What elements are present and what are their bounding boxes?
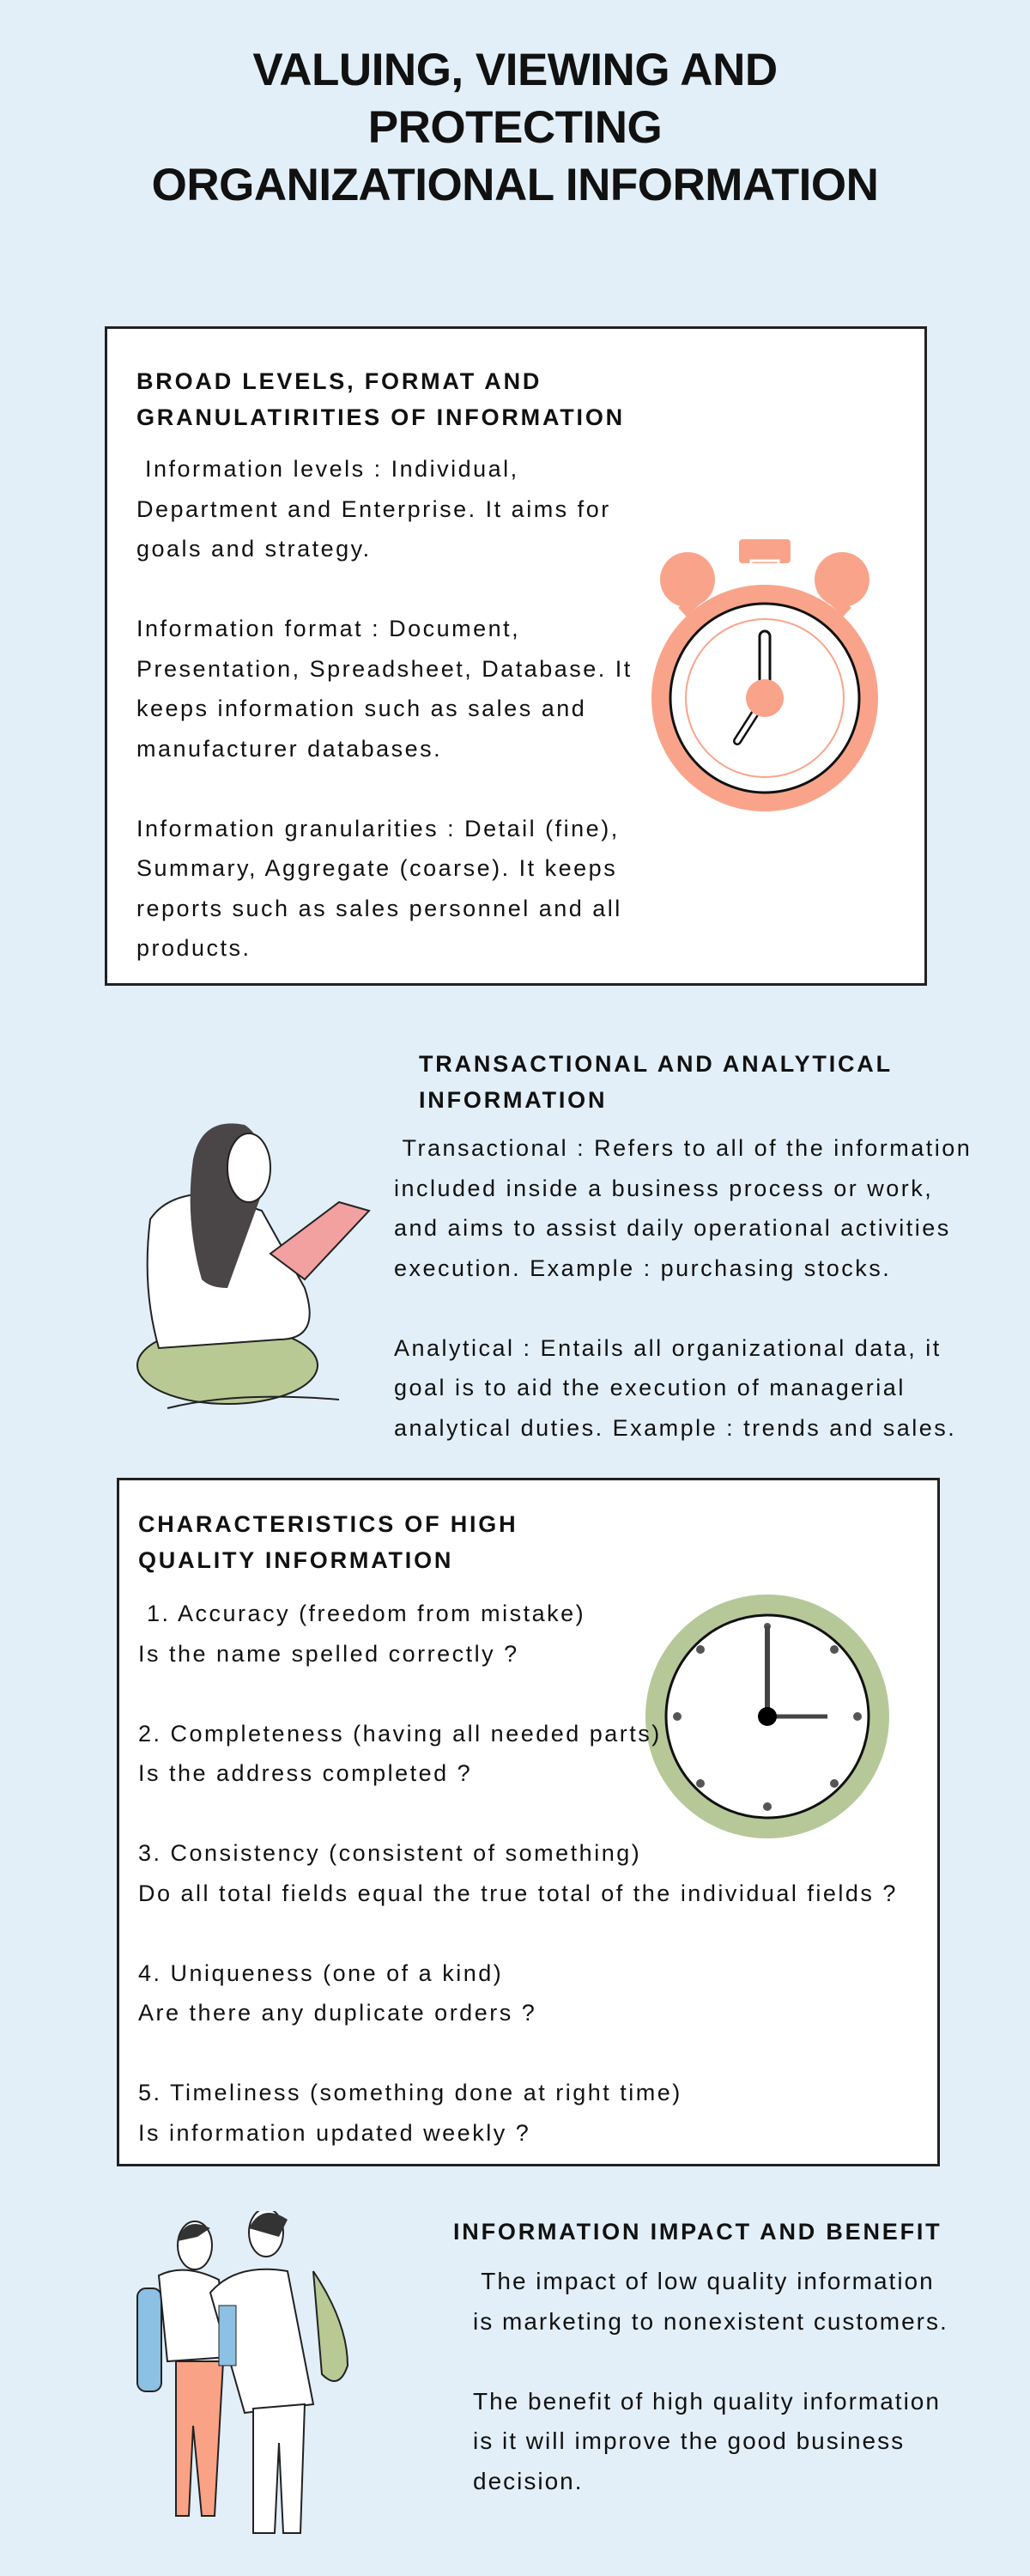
heading: broad levels: BROAD LEVELS, FORMAT AND bbox=[136, 368, 542, 394]
icon: stopwatch bbox=[651, 539, 878, 811]
title bbox=[152, 45, 878, 210]
title: ORGANIZATIONAL INFORMATION bbox=[152, 160, 878, 210]
heading: transactional and analytical: TRANSACTIONAL AND ANALYTICAL bbox=[419, 1051, 893, 1077]
heading: transactional and analytical bbox=[419, 1051, 893, 1113]
icon: wall clock bbox=[645, 1595, 889, 1838]
title: VALUING, VIEWING AND bbox=[252, 45, 778, 95]
heading: broad levels: GRANULATIRITIES OF INFORMATION bbox=[136, 404, 625, 430]
heading: characteristics: QUALITY INFORMATION bbox=[138, 1547, 453, 1573]
illustration: two students bbox=[136, 2211, 348, 2534]
illustration: girl reading bbox=[136, 1123, 371, 1409]
heading: characteristics bbox=[138, 1511, 518, 1573]
panel: characteristics of high quality information bbox=[117, 1478, 940, 2166]
title: PROTECTING bbox=[368, 102, 662, 153]
heading: transactional and analytical: INFORMATION bbox=[419, 1087, 607, 1113]
heading: information impact and benefit: INFORMATION IMPACT AND BENEFIT bbox=[453, 2219, 942, 2245]
heading: broad levels bbox=[136, 368, 625, 430]
text block: levels formats granularities: Information levels : Individual, Department and Enterprise. It aims for goals and strategy. Information format : Document, Presentation, Spreadsheet, Database. It keeps information such as sales and manufacturer databases. Information granularities : Detail (fine), Summary, Aggregate (coarse). It keeps reports such as sales personnel and all products. bbox=[136, 456, 633, 961]
text block: five characteristics: 1. Accuracy (freedom from mistake) Is the name spelled correctly ? 2. Completeness (having all needed parts) Is the address completed ? 3. Consistency (consistent of something) Do all total fields equal the true total of the individual fields ? 4. Uniqueness (one of a kind) Are there any duplicate orders ? 5. Timeliness (something done at right time) Is information updated weekly ? bbox=[138, 1601, 898, 2145]
text block: transactional and analytical: Transactional : Refers to all of the information included inside a business process or work, and aims to assist daily operational activities execution. Example : purchasing stocks. Analytical : Entails all organizational data, it goal is to aid the execution of managerial analytical duties. Example : trends and sales. bbox=[394, 1135, 972, 1441]
heading: characteristics: CHARACTERISTICS OF HIGH bbox=[138, 1511, 518, 1537]
text block: impact and benefit: The impact of low quality information is marketing to nonexistent customers. The benefit of high quality information is it will improve the good business decision. bbox=[473, 2268, 948, 2494]
panel: broad levels bbox=[105, 326, 927, 986]
